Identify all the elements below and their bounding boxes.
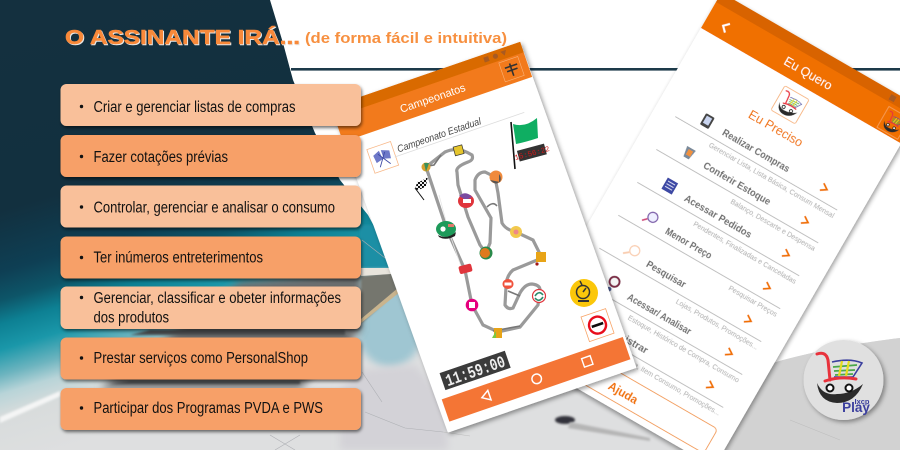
row: Registrar: Registrar xyxy=(606,325,650,357)
racing helmet: red xyxy=(458,193,474,208)
digital clock: 11:59:00 xyxy=(444,354,508,392)
phone header xyxy=(331,42,532,142)
championship name: Campeonato Estadual xyxy=(396,116,483,155)
row: Acessar / Analisar xyxy=(575,262,753,385)
navigation bar xyxy=(442,337,630,422)
list of benefits xyxy=(60,84,361,430)
row: Realizar Compras xyxy=(670,100,847,220)
championship name xyxy=(367,97,527,173)
row: Registrar xyxy=(556,300,732,417)
row: Pesquisar: Lojas, Produtos, Promoções... xyxy=(674,299,759,352)
row: Conferir Estoque: Balanço, Descarte e Despensa xyxy=(729,199,816,253)
race track xyxy=(415,118,598,338)
item 6 xyxy=(60,338,361,380)
heading: Eu Preciso: Eu Preciso xyxy=(746,108,805,150)
title: (de forma fácil e intuitiva) xyxy=(305,30,507,47)
row: Registrar: Lista, Item Consumo, Promoções... xyxy=(623,357,721,417)
lap timer: 15:56:22 xyxy=(514,146,551,163)
stopwatch icon xyxy=(570,279,598,307)
row: Menor Preço: Menor Preço xyxy=(663,226,714,262)
row: Conferir Estoque: Conferir Estoque xyxy=(701,161,773,208)
row: Acessar / Analisar: Estoque, Histórico de Compra, Consumo xyxy=(626,315,740,385)
brand logo badge xyxy=(804,340,884,420)
item 5: Gerenciar, classificar e obeter informações xyxy=(94,290,341,307)
penalty sign xyxy=(581,309,614,342)
green flag xyxy=(511,118,538,169)
row: Acessar Pedidos: Pendentes, Finalizadas e Canceladas xyxy=(692,221,797,286)
phone header: Campeonatos xyxy=(399,82,468,116)
item 3 xyxy=(60,186,361,228)
item 7 xyxy=(60,388,361,430)
track checkpoints xyxy=(422,145,546,338)
title xyxy=(65,26,507,49)
row: Acessar Pedidos: Acessar Pedidos xyxy=(682,193,754,241)
racing helmet: green xyxy=(436,221,456,239)
brand logo badge: Play xyxy=(842,400,870,415)
row: Acessar / Analisar: Acessar/ Analisar xyxy=(625,292,693,338)
item 7: Participar dos Programas PVDA e PWS xyxy=(94,400,323,417)
item 6: Prestar serviços como PersonalShop xyxy=(94,350,308,367)
item 5: dos produtos xyxy=(94,310,169,326)
row: Menor Preço xyxy=(613,197,791,319)
item 4 xyxy=(60,236,361,278)
row: Realizar Compras: Gerenciar Lista, Lista Básica, Consum Mensal xyxy=(707,142,835,220)
checkered flag xyxy=(415,176,428,200)
item 1: Criar e gerenciar listas de compras xyxy=(94,99,296,116)
phone: Campeonatos xyxy=(331,41,637,434)
app logo xyxy=(771,86,809,124)
item 4: Ter inúmeros entreterimentos xyxy=(94,250,263,266)
brand logo badge: Ixcp xyxy=(854,397,870,406)
row: Conferir Estoque xyxy=(651,133,828,253)
phone header xyxy=(701,0,900,144)
row: Pesquisar xyxy=(594,230,772,352)
item 5 xyxy=(60,286,361,329)
phone: Eu Quero menu xyxy=(514,0,900,450)
row: Realizar Compras: Realizar Compras xyxy=(720,128,792,175)
row: Acessar Pedidos xyxy=(632,165,809,286)
item 2 xyxy=(60,135,361,177)
item 2: Fazer cotações prévias xyxy=(94,149,228,166)
dark horizontal rule xyxy=(291,68,900,71)
item 3: Controlar, gerenciar e analisar o consumo xyxy=(94,200,335,216)
button: Ajuda: Ajuda xyxy=(606,381,640,407)
button: Ajuda xyxy=(530,329,718,450)
phone header: Eu Quero xyxy=(781,54,835,93)
item 1 xyxy=(60,84,361,126)
row: Pesquisar: Pesquisar xyxy=(644,259,688,291)
row: Menor Preço: Pesquisar Preços xyxy=(727,285,778,319)
title: O ASSINANTE IRÁ... xyxy=(65,26,300,49)
